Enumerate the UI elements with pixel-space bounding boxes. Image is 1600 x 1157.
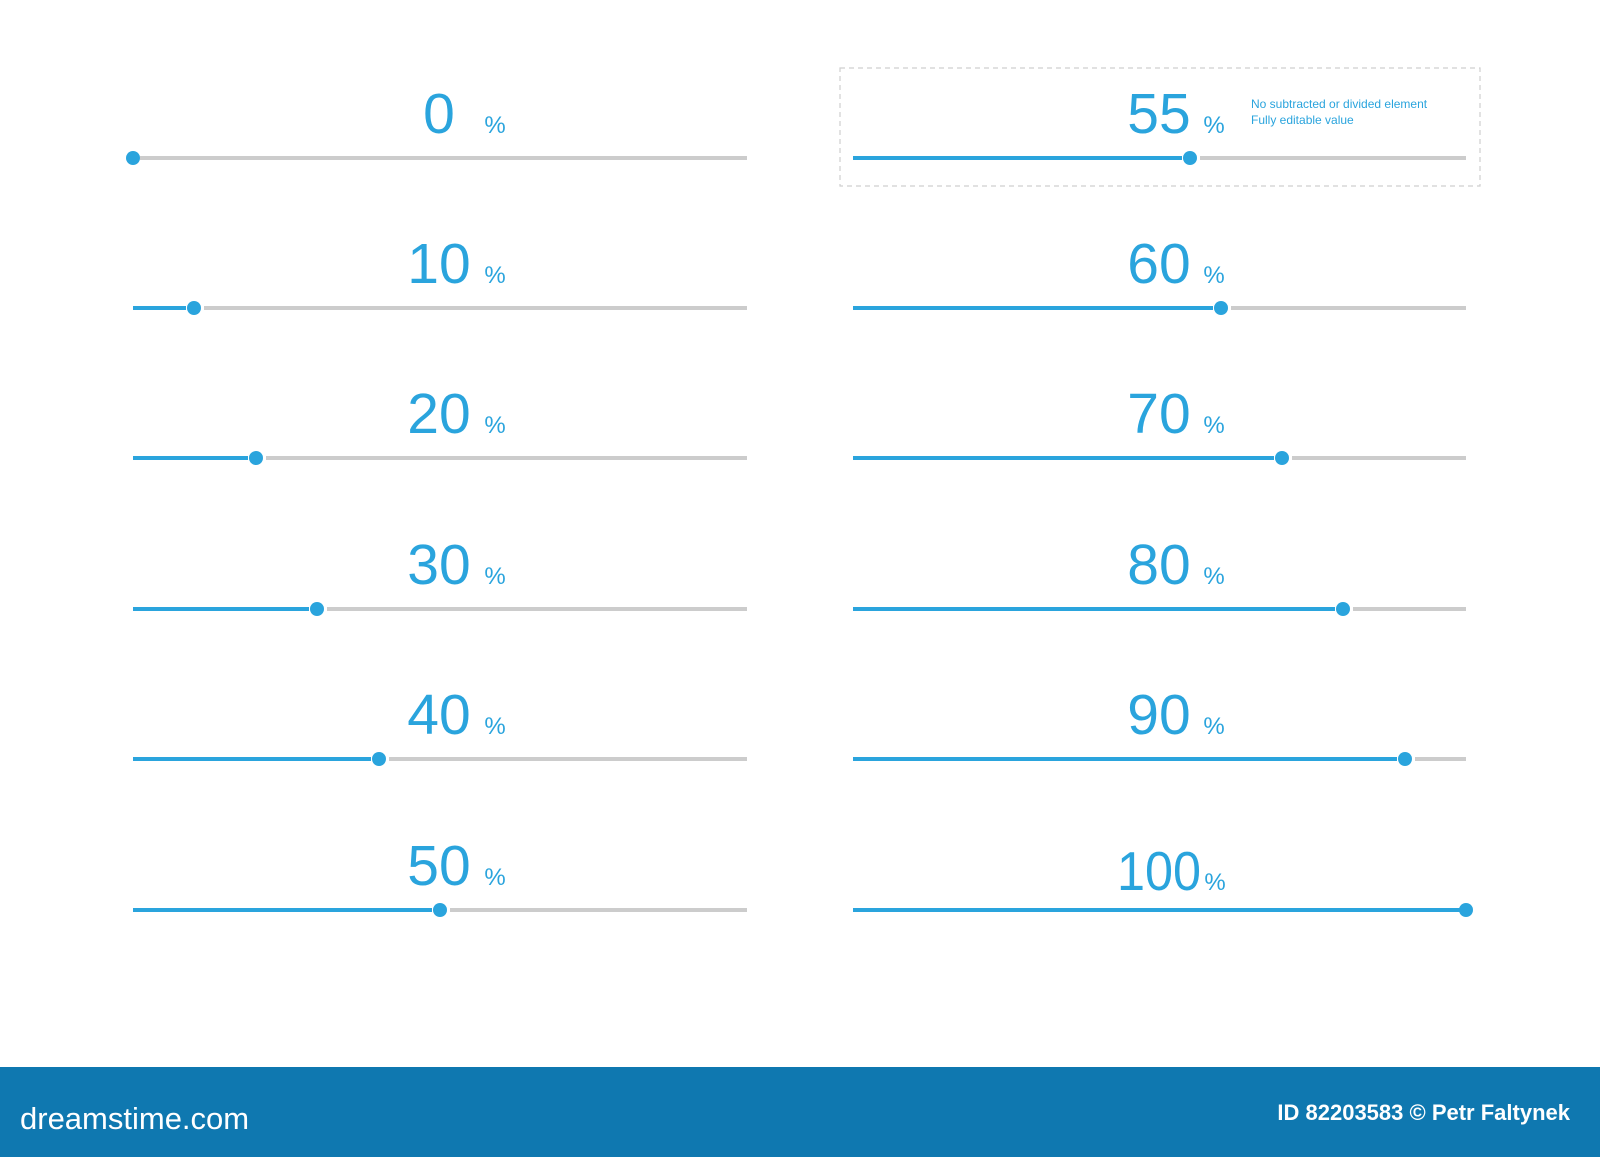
slider 50: %: [484, 864, 506, 891]
slider 80: 80: [1127, 533, 1191, 597]
slider 10: [133, 232, 747, 315]
slider 10: %: [484, 262, 506, 289]
slider 55: %: [1203, 112, 1225, 139]
slider 50: 50: [407, 834, 471, 898]
slider 70: 70: [1127, 382, 1191, 446]
slider 80: [853, 533, 1466, 616]
slider 100: %: [1204, 869, 1226, 896]
slider 40: 40: [407, 683, 471, 747]
slider 30: 30: [407, 533, 471, 597]
slider 40: [133, 683, 747, 766]
callout text: No subtracted or divided element: [1251, 97, 1428, 111]
credit: ID 82203583 © Petr Faltynek: [1277, 1100, 1571, 1125]
slider 40: %: [484, 713, 506, 740]
slider 90: [853, 683, 1466, 766]
footer banner: [0, 1067, 1600, 1157]
callout text: [1251, 97, 1428, 127]
logo text: dreamstime.com: [20, 1101, 249, 1136]
slider 30: %: [484, 563, 506, 590]
slider 60: [853, 232, 1466, 315]
slider 60: %: [1203, 262, 1225, 289]
slider 55: 55: [1127, 82, 1191, 146]
slider 55: [853, 82, 1466, 165]
slider 60: 60: [1127, 232, 1191, 296]
slider 90: %: [1203, 713, 1225, 740]
slider 90: 90: [1127, 683, 1191, 747]
slider 0: [126, 82, 747, 165]
slider 0: 0: [423, 82, 455, 146]
slider 20: 20: [407, 382, 471, 446]
slider 0: %: [484, 112, 506, 139]
callout text: Fully editable value: [1251, 113, 1354, 127]
slider 80: %: [1203, 563, 1225, 590]
slider 100: 100: [1117, 840, 1201, 902]
slider 30: [133, 533, 747, 616]
slider 10: 10: [407, 232, 471, 296]
slider 20: [133, 382, 747, 465]
slider 20: %: [484, 412, 506, 439]
slider 70: [853, 382, 1466, 465]
callout box: 55%: [840, 68, 1480, 186]
slider 50: [133, 834, 747, 917]
slider 70: %: [1203, 412, 1225, 439]
slider 100: [853, 840, 1473, 917]
